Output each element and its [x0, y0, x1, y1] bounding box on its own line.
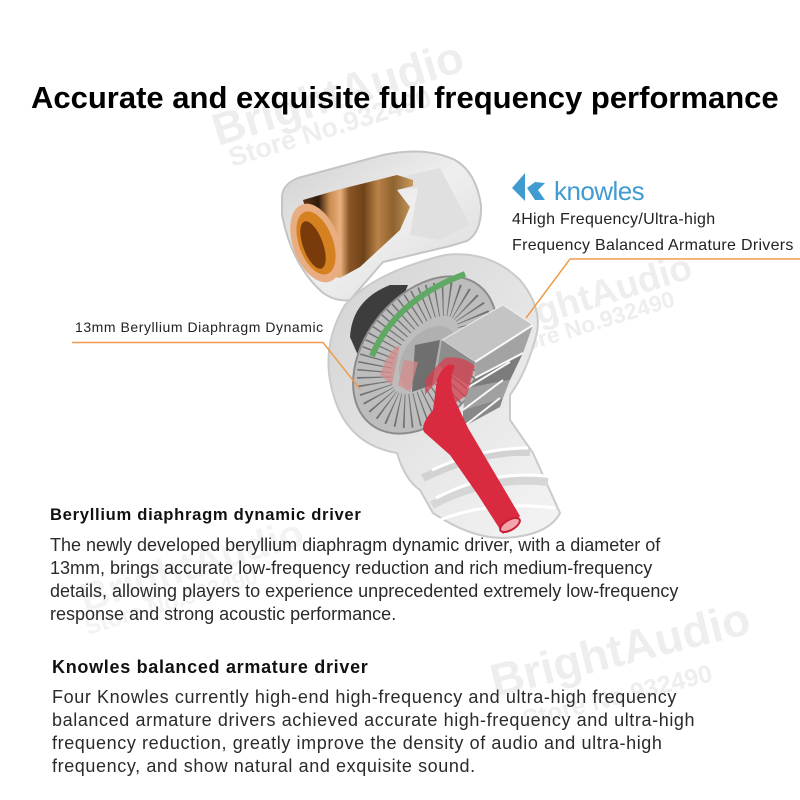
section: knowles driver [52, 657, 695, 776]
watermarks: BrightAudio [206, 31, 470, 156]
watermarks: Store No.932490 [82, 563, 261, 640]
title: Accurate and exquisite full frequency performance [31, 80, 779, 115]
body text: beryllium driver: response and strong acoustic performance. [50, 604, 396, 624]
callout text: armature drivers: 4High Frequency/Ultra-high [512, 211, 715, 228]
earphone lower shell [328, 254, 560, 538]
watermarks: BrightAudio [485, 592, 755, 707]
body text: knowles driver: frequency, and show natural and exquisite sound. [52, 756, 476, 776]
watermarks: Store No.932490 [225, 83, 435, 173]
body text: knowles driver: balanced armature drivers achieved accurate high-frequency and ultra-high [52, 710, 695, 730]
section: beryllium driver [50, 505, 678, 624]
callout line: armature drivers [526, 259, 800, 318]
watermarks: BrightAudio [75, 511, 309, 621]
body text: knowles driver [52, 687, 695, 776]
shell interior shading [345, 168, 470, 240]
earphone upper shell [282, 151, 481, 300]
callout text: armature drivers: Frequency Balanced Armature Drivers [512, 237, 794, 254]
gold connector [280, 175, 413, 289]
knowles logo text: knowles [554, 176, 644, 206]
body text: beryllium driver: The newly developed beryllium diaphragm dynamic driver, with a diameter of [50, 535, 660, 555]
heading: knowles driver: Knowles balanced armature driver [52, 657, 369, 677]
heading: beryllium driver: Beryllium diaphragm dynamic driver [50, 505, 362, 524]
body text: beryllium driver [50, 535, 678, 624]
watermarks [75, 31, 755, 734]
watermarks: Store No.932490 [499, 286, 678, 363]
balanced armature driver stack [438, 305, 533, 427]
watermarks: BrightAudio [480, 246, 697, 348]
body text: beryllium driver: details, allowing players to experience unprecedented extremely low-frequency [50, 581, 678, 601]
body text: knowles driver: Four Knowles currently high-end high-frequency and ultra-high frequency [52, 687, 677, 707]
callout text: dynamic driver: 13mm Beryllium Diaphragm Dynamic [75, 319, 324, 335]
body text: knowles driver: frequency reduction, greatly improve the density of audio and ultra-high [52, 733, 663, 753]
icon: knowles logo mark [512, 173, 545, 201]
watermarks: Store No.932490 [520, 660, 715, 734]
callout text: armature drivers [512, 211, 794, 254]
beryllium diaphragm dynamic driver [324, 249, 526, 461]
body text: beryllium driver: 13mm, brings accurate low-frequency reduction and rich medium-frequency [50, 558, 652, 578]
callout line: dynamic driver [72, 342, 360, 389]
red tube [423, 357, 522, 535]
nozzle ribs [423, 448, 555, 520]
dark driver back [350, 285, 408, 360]
